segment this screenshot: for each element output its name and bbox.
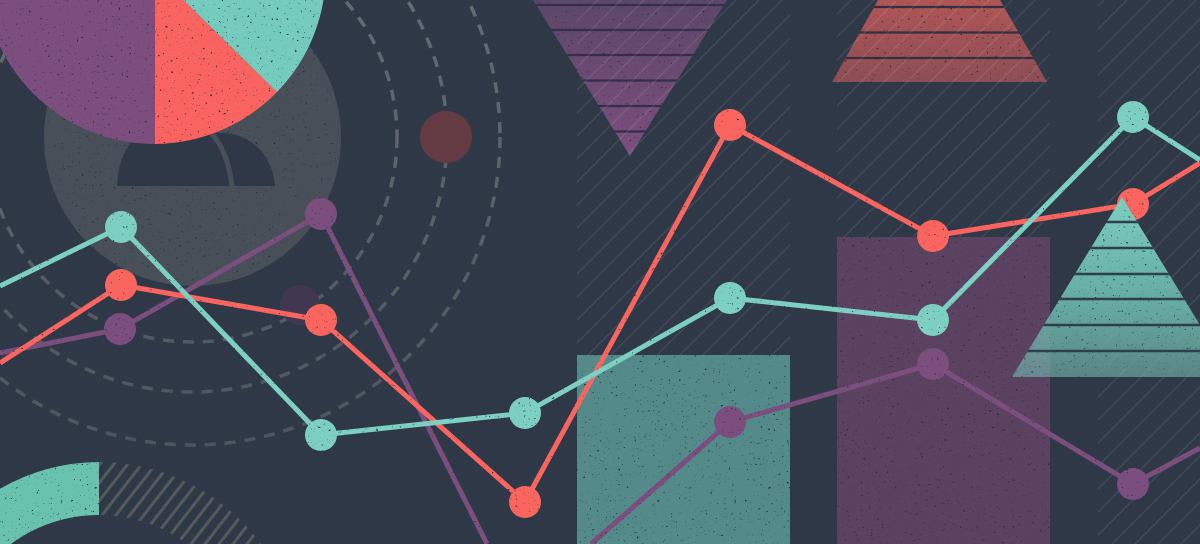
diagonal hatch columns bbox=[577, 0, 1200, 544]
purple line series bbox=[0, 198, 1200, 544]
teal striped triangle bbox=[1010, 195, 1200, 379]
icon: dome bbox=[117, 130, 275, 186]
coral line series bbox=[0, 109, 1200, 518]
pie chart bbox=[0, 0, 326, 144]
inverted purple striped triangle bbox=[530, 0, 730, 160]
grey circle with dome icon bbox=[44, 0, 341, 286]
hatched donut segment bbox=[99, 462, 261, 544]
teal bar bbox=[577, 355, 790, 544]
dark purple planet dot bbox=[280, 285, 320, 325]
coral striped trapezoid bbox=[830, 0, 1050, 84]
purple bar bbox=[837, 237, 1050, 544]
brown planet dot bbox=[420, 111, 472, 163]
dashed orbit rings bbox=[0, 0, 500, 445]
teal line series bbox=[0, 101, 1200, 451]
teal donut segment bbox=[0, 462, 99, 544]
